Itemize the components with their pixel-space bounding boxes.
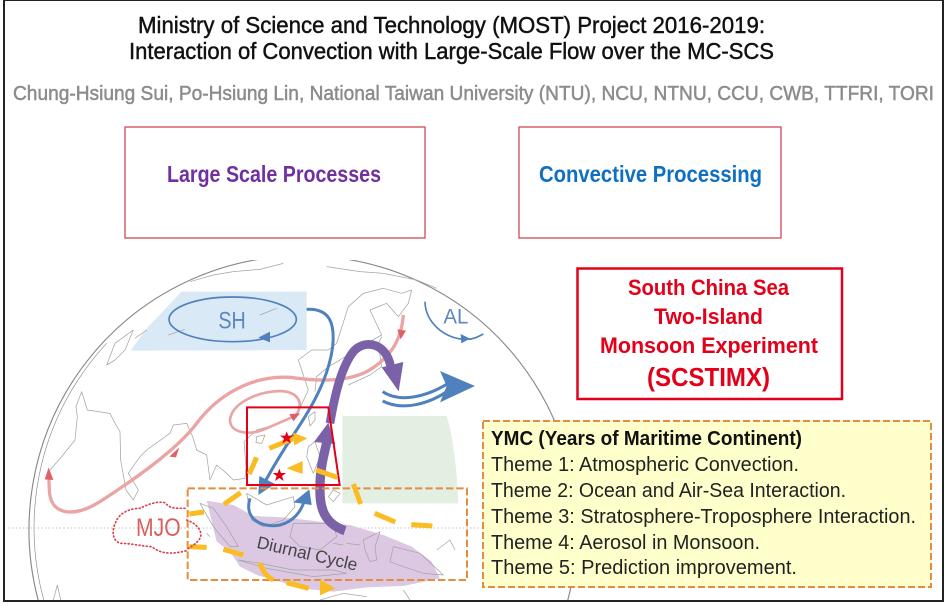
diurnal cycle shaded region xyxy=(207,501,440,592)
blue Siberian high ellipse xyxy=(169,297,296,342)
purple jet arrow xyxy=(330,344,403,423)
MJO dotted cloud xyxy=(113,502,201,553)
Siberian high shaded area xyxy=(131,292,307,351)
red SCS experiment box xyxy=(247,407,340,485)
blue equatorial arrow xyxy=(249,489,312,526)
panel: YMC themes: Theme 5: Prediction improvement. xyxy=(491,557,797,579)
panel: YMC themes: Theme 3: Stratosphere-Troposphere Interaction. xyxy=(491,506,916,528)
pink subtropical jet arrow xyxy=(45,315,406,512)
globe outline xyxy=(29,256,577,601)
equator line xyxy=(8,528,482,529)
MJO dotted cloud: MJO xyxy=(136,515,181,542)
panel: South China Sea experiment: South China Sea xyxy=(628,275,790,300)
panel: South China Sea experiment: Two-Island xyxy=(654,304,763,329)
blue double outflow arrow xyxy=(383,371,475,406)
red stars: two island sites xyxy=(273,431,293,481)
Aleutian low xyxy=(425,302,483,343)
panel: large scale processes: Large Scale Processes xyxy=(167,161,381,187)
blue cold surge arrow xyxy=(258,309,333,495)
western Pacific shaded area xyxy=(342,416,458,503)
panel: YMC themes xyxy=(483,421,931,587)
pink loop arrow xyxy=(230,391,300,433)
panel: YMC themes: Theme 2: Ocean and Air-Sea Interaction. xyxy=(491,480,846,502)
blue Siberian high ellipse: SH xyxy=(218,308,246,335)
panel: YMC themes: YMC (Years of Maritime Continent) xyxy=(491,428,802,450)
yellow dashed monsoon arrows xyxy=(189,433,432,595)
title: Interaction of Convection with Large-Scale Flow over the MC-SCS xyxy=(129,38,774,64)
panel: YMC themes: Theme 4: Aerosol in Monsoon. xyxy=(491,532,760,554)
panel: convective processing: Convective Processing xyxy=(539,161,762,187)
panel: YMC themes: Theme 1: Atmospheric Convection. xyxy=(491,454,799,476)
purple cross-equatorial arrow xyxy=(314,423,345,531)
orange dashed maritime continent box xyxy=(188,488,467,580)
panel: South China Sea experiment xyxy=(578,268,842,399)
coastlines xyxy=(50,263,455,600)
panel: South China Sea experiment: Monsoon Experiment xyxy=(600,333,819,358)
Aleutian low: AL xyxy=(443,305,468,329)
panel: South China Sea experiment: (SCSTIMX) xyxy=(647,362,770,392)
title xyxy=(129,12,774,64)
map: globe with monsoon circulation xyxy=(8,256,577,601)
Diurnal Cycle label: Diurnal Cycle xyxy=(255,532,360,575)
panel: large scale processes xyxy=(125,127,425,238)
panel: convective processing xyxy=(519,127,781,238)
title: Ministry of Science and Technology (MOST) Project 2016-2019: xyxy=(138,12,765,38)
